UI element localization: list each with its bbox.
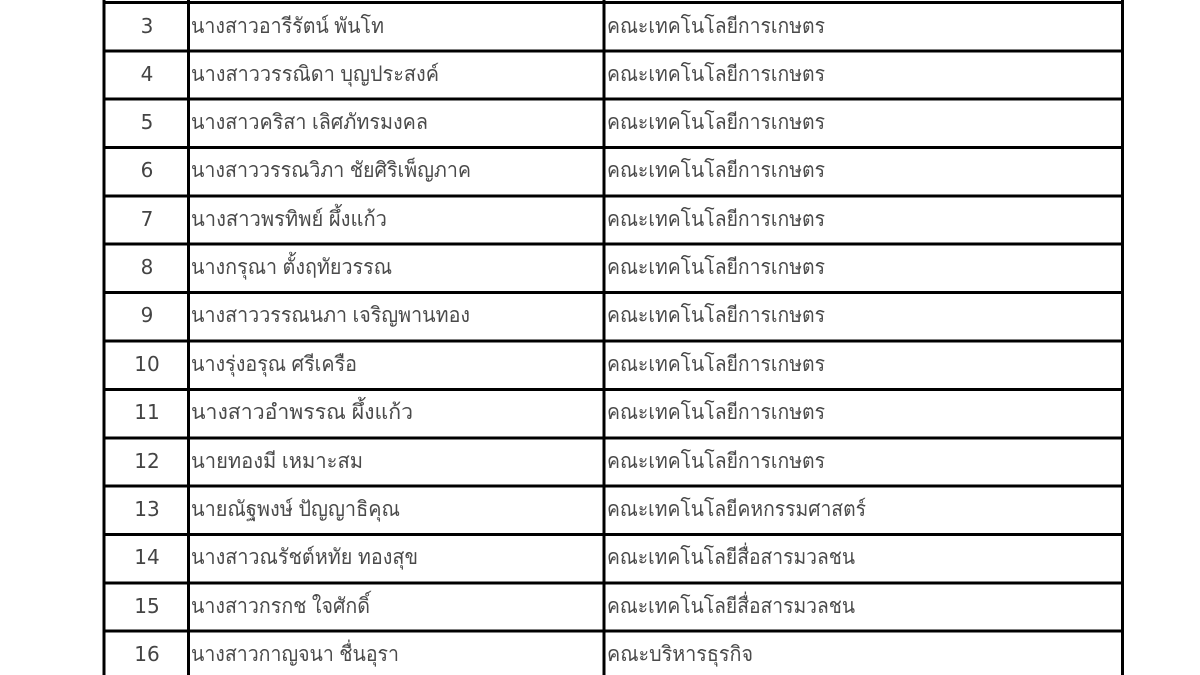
row 3 <box>141 14 825 38</box>
row 11: นางสาวอำพรรณ ผึ้งแก้ว <box>191 397 413 424</box>
row 4: นางสาววรรณิดา บุญประสงค์ <box>191 62 439 87</box>
row 9: คณะเทคโนโลยีการเกษตร <box>607 303 825 327</box>
row 13: นายณัฐพงษ์ ปัญญาธิคุณ <box>191 497 400 522</box>
row 15: คณะเทคโนโลยีสื่อสารมวลชน <box>607 591 855 618</box>
row 11: 11 <box>134 400 160 424</box>
row 9 <box>141 303 825 327</box>
row 13 <box>134 497 866 522</box>
row 5: นางสาวคริสา เลิศภัทรมงคล <box>191 111 428 134</box>
row 14: นางสาวณรัชต์หทัย ทองสุข <box>191 545 418 570</box>
row 7: นางสาวพรทิพย์ ผึ้งแก้ว <box>191 204 387 231</box>
row 9: นางสาววรรณนภา เจริญพานทอง <box>191 304 470 327</box>
row 13: คณะเทคโนโลยีคหกรรมศาสตร์ <box>607 497 866 521</box>
row 14 <box>134 542 855 570</box>
row 5 <box>141 110 825 134</box>
row 3: นางสาวอารีรัตน์ พันโท <box>191 14 384 38</box>
row 5: คณะเทคโนโลยีการเกษตร <box>607 110 825 134</box>
row 3: คณะเทคโนโลยีการเกษตร <box>607 14 825 38</box>
row 12: คณะเทคโนโลยีการเกษตร <box>607 449 825 473</box>
row 9: 9 <box>141 303 153 327</box>
row 14: 14 <box>134 545 160 569</box>
row 6: คณะเทคโนโลยีการเกษตร <box>607 158 825 182</box>
row 11 <box>134 397 825 424</box>
row 15: 15 <box>134 594 160 618</box>
row 16: 16 <box>134 642 160 666</box>
row 12 <box>134 449 825 473</box>
row 12: นายทองมี เหมาะสม <box>191 450 363 473</box>
row 16: นางสาวกาญจนา ชื่นอุรา <box>191 639 399 667</box>
row 3: 3 <box>141 14 153 38</box>
row 15: นางสาวกรกช ใจศักดิ์ <box>191 590 372 618</box>
row 7: คณะเทคโนโลยีการเกษตร <box>607 207 825 231</box>
row 5: 5 <box>141 110 153 134</box>
row 4: 4 <box>141 62 153 86</box>
row 14: คณะเทคโนโลยีสื่อสารมวลชน <box>607 542 855 569</box>
row 7: 7 <box>141 207 153 231</box>
row 13: 13 <box>134 497 160 521</box>
row 10: 10 <box>134 352 160 376</box>
row 7 <box>141 204 825 231</box>
row 4: คณะเทคโนโลยีการเกษตร <box>607 62 825 86</box>
row 8: คณะเทคโนโลยีการเกษตร <box>607 255 825 279</box>
row 16 <box>134 639 753 667</box>
row 10 <box>134 352 825 377</box>
row 4 <box>141 62 825 87</box>
row 6 <box>141 156 825 182</box>
row 8: 8 <box>141 255 153 279</box>
row 11: คณะเทคโนโลยีการเกษตร <box>607 400 825 424</box>
row 6: 6 <box>141 158 153 182</box>
row 12: 12 <box>134 449 160 473</box>
row 15 <box>134 590 855 618</box>
row 8: นางกรุณา ตั้งฤทัยวรรณ <box>191 252 392 280</box>
row 8 <box>141 252 825 280</box>
row 16: คณะบริหารธุรกิจ <box>607 643 753 667</box>
row 10: นางรุ่งอรุณ ศรีเครือ <box>191 353 357 377</box>
row 10: คณะเทคโนโลยีการเกษตร <box>607 352 825 376</box>
row 6: นางสาววรรณวิภา ชัยศิริเพ็ญภาค <box>191 156 471 182</box>
